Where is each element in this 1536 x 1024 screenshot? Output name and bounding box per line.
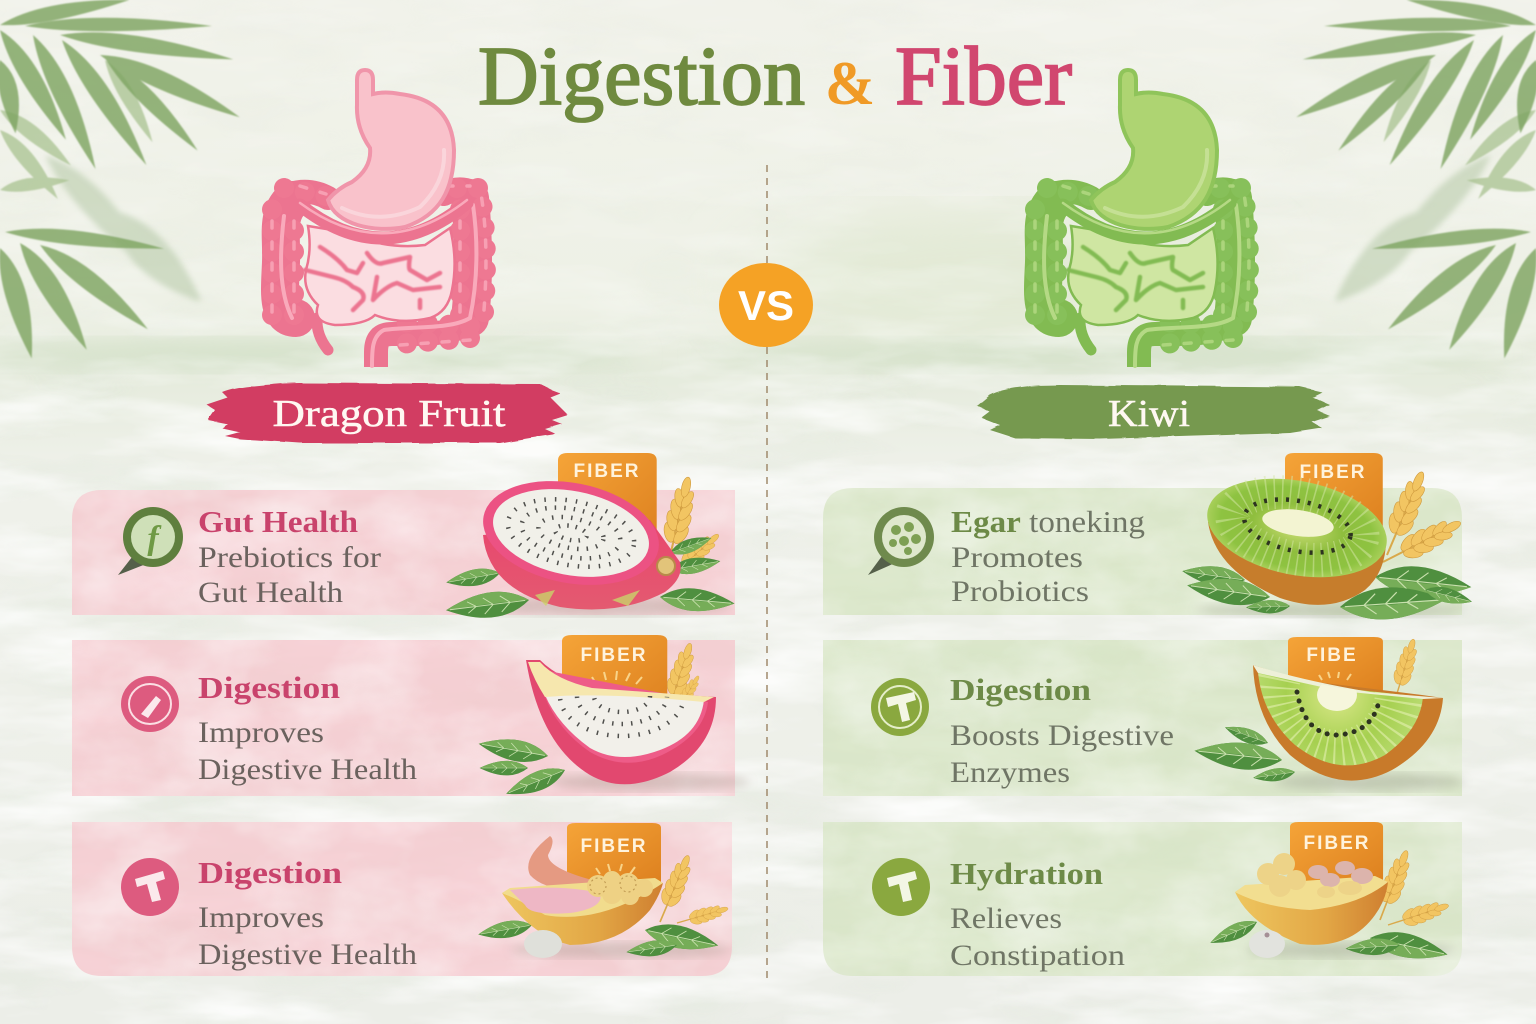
text: hydration: Constipation	[950, 939, 1125, 972]
text: digestion one	[198, 670, 417, 786]
background: watercolor paper with water ripples	[0, 214, 1536, 1024]
illustration: kiwi half: FIBER	[1300, 462, 1366, 483]
icon: digestion badge	[871, 678, 929, 736]
center dashed divider	[766, 165, 768, 980]
text: digestion one: Digestion	[198, 670, 340, 705]
panel: kiwi hydration	[823, 822, 1462, 976]
text: hydration	[950, 856, 1125, 972]
illustration: kiwi wedge	[1193, 630, 1465, 791]
illustration: dragon fruit half	[445, 453, 736, 623]
illustration: kiwi wedge: FIBE	[1306, 645, 1358, 666]
banner: dragon fruit: Dragon Fruit	[272, 393, 506, 435]
title: Fiber	[895, 30, 1072, 123]
text: gut health: Gut Health	[198, 576, 343, 609]
text: hydration: Relieves	[950, 902, 1062, 935]
panel: kiwi egar toneking	[823, 453, 1474, 623]
icon: magnifier: f	[147, 520, 162, 557]
text: kiwi digestion: Boosts Digestive	[950, 719, 1174, 752]
text: egar toneking: Probiotics	[951, 575, 1089, 608]
text: gut health: Gut Health	[198, 504, 358, 539]
illustration: filled kiwi bowl	[1207, 822, 1455, 966]
text: egar toneking	[951, 504, 1145, 608]
icon: hydration badge	[872, 858, 930, 916]
text: egar toneking: Promotes	[951, 541, 1083, 574]
illustration: filled kiwi bowl: FIBER	[1304, 833, 1370, 854]
palm leaves: top left	[0, 0, 244, 361]
title	[478, 30, 1072, 123]
text: digestion one: Digestive Health	[198, 753, 417, 786]
digestive system: green	[1035, 70, 1249, 367]
icon: magnifier	[868, 507, 934, 575]
icon: digestion badge	[121, 858, 179, 916]
illustration: dragon fruit half: FIBER	[574, 461, 640, 482]
illustration: kiwi half	[1181, 453, 1474, 623]
VS badge	[719, 263, 813, 347]
banner: kiwi: Kiwi	[1108, 393, 1190, 435]
illustration: filled fruit bowl: FIBER	[580, 836, 648, 857]
panel: kiwi digestion	[823, 630, 1465, 796]
digestive system: pink	[272, 70, 486, 367]
text: digestion two: Digestion	[198, 855, 342, 890]
illustration: dragon fruit wedge	[477, 635, 750, 803]
text: digestion two	[198, 855, 417, 971]
text: egar toneking: Egar toneking	[951, 504, 1145, 539]
panel: dragon fruit gut health	[72, 453, 736, 623]
text: digestion one: Improves	[198, 716, 324, 749]
palm leaves: top right	[1292, 0, 1536, 361]
text: digestion two: Improves	[198, 901, 324, 934]
title: Digestion	[478, 30, 805, 123]
panel: dragon fruit digestion one	[72, 635, 750, 803]
icon: digestion badge	[121, 676, 179, 732]
text: hydration: Hydration	[950, 856, 1103, 891]
icon: magnifier	[118, 507, 183, 575]
VS badge: VS	[738, 282, 794, 329]
title: &	[825, 50, 875, 118]
text: kiwi digestion: Digestion	[950, 672, 1091, 707]
banner: kiwi	[977, 385, 1330, 439]
illustration: dragon fruit wedge: FIBER	[580, 645, 648, 666]
text: gut health: Prebiotics for	[198, 541, 381, 574]
text: digestion two: Digestive Health	[198, 938, 417, 971]
panel: dragon fruit digestion two	[72, 822, 732, 976]
text: kiwi digestion	[950, 672, 1174, 789]
illustration: filled fruit bowl	[477, 823, 730, 960]
text: gut health	[198, 504, 381, 609]
banner: dragon fruit	[207, 383, 568, 443]
text: kiwi digestion: Enzymes	[950, 756, 1070, 789]
